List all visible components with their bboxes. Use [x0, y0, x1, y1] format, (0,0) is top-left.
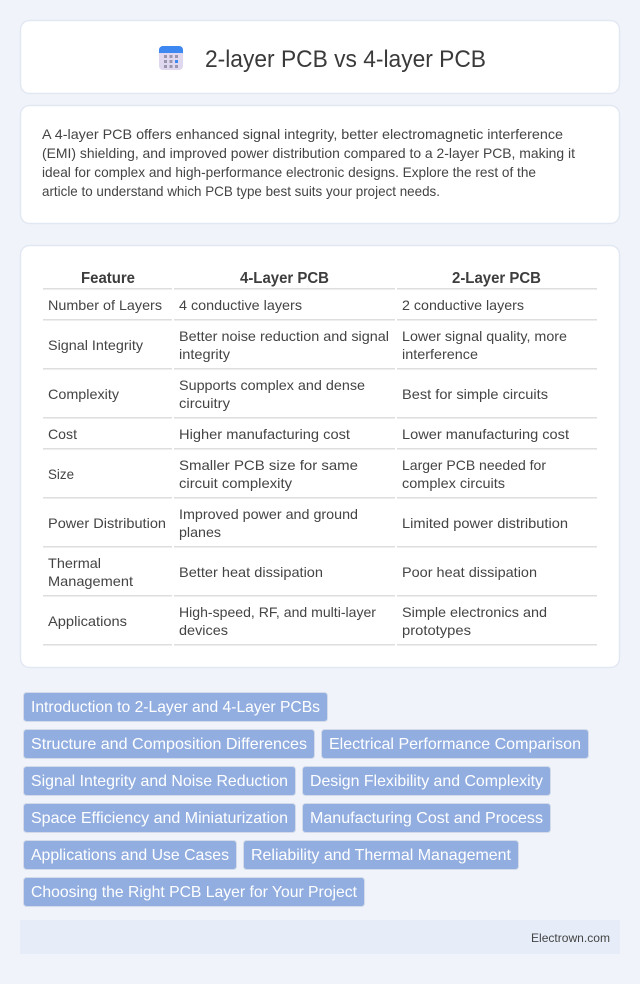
row: cost	[48, 426, 569, 442]
row: signal integrity: interference	[402, 346, 478, 362]
text block: intro paragraph: ideal for complex and high-performance electronic designs. Explore the rest of the	[42, 164, 536, 180]
tag: applications: Applications and Use Cases	[31, 847, 229, 864]
row: complexity: circuitry	[179, 395, 230, 411]
tag: space efficiency	[24, 804, 296, 832]
tag: reliability	[244, 840, 518, 870]
row: signal integrity	[48, 328, 567, 362]
row: size: circuit complexity	[179, 475, 292, 491]
row: signal integrity: integrity	[179, 346, 230, 362]
panel: header	[20, 20, 620, 94]
row: complexity	[48, 377, 548, 411]
text block: intro paragraph: article to understand which PCB type best suits your project needs.	[42, 183, 440, 199]
tag: space efficiency: Space Efficiency and Miniaturization	[31, 810, 288, 827]
row: cost: Higher manufacturing cost	[179, 426, 350, 442]
row: applications: Simple electronics and	[402, 604, 547, 620]
row: signal integrity: Lower signal quality, more	[402, 328, 567, 344]
row: thermal management: Poor heat dissipation	[402, 564, 537, 580]
row: applications: Applications	[48, 613, 127, 629]
row: size: complex circuits	[402, 475, 505, 491]
row: power distribution: planes	[179, 524, 221, 540]
tag: signal integrity	[24, 766, 296, 796]
row: power distribution: Limited power distribution	[402, 515, 568, 531]
row: signal integrity: Better noise reduction and signal	[179, 328, 389, 344]
row: cost: Cost	[48, 426, 77, 442]
tag: electrical performance: Electrical Performance Comparison	[329, 736, 581, 753]
table header row: 4-Layer PCB	[240, 270, 329, 287]
text block: intro paragraph: A 4-layer PCB offers enhanced signal integrity, better electromagnetic interference	[42, 126, 563, 142]
row: size: Larger PCB needed for	[402, 457, 546, 473]
footer credit: Electrown.com	[531, 931, 610, 945]
tag: electrical performance	[322, 730, 588, 758]
row: number of layers: Number of Layers	[48, 297, 162, 313]
text block: intro paragraph	[42, 126, 575, 199]
tag: structure	[24, 730, 314, 758]
row: thermal management	[48, 555, 537, 589]
row: complexity: Supports complex and dense	[179, 377, 365, 393]
panel: introduction	[20, 106, 620, 224]
row: size: Size	[48, 466, 74, 482]
text block: intro paragraph: (EMI) shielding, and improved power distribution compared to a 2-layer PCB, making it	[42, 145, 575, 161]
row: number of layers: 4 conductive layers	[179, 297, 302, 313]
icon: calendar grid	[159, 46, 183, 70]
row: power distribution: Improved power and ground	[179, 506, 358, 522]
row: complexity: Complexity	[48, 386, 119, 402]
row: applications: devices	[179, 622, 228, 638]
row: applications	[48, 604, 547, 638]
row: signal integrity: Signal Integrity	[48, 337, 143, 353]
row: number of layers	[48, 297, 524, 313]
tag: choosing layer	[24, 878, 364, 906]
row: power distribution	[48, 506, 568, 540]
tag: manufacturing cost: Manufacturing Cost and Process	[310, 810, 543, 827]
table header row	[81, 270, 541, 287]
tag: introduction	[24, 692, 328, 722]
tag: design flexibility	[302, 766, 550, 796]
tag: choosing layer: Choosing the Right PCB Layer for Your Project	[31, 884, 358, 901]
tag: structure: Structure and Composition Differences	[31, 736, 307, 753]
table header row: 2-Layer PCB	[452, 270, 541, 287]
panel: comparison table	[20, 246, 620, 668]
tag: reliability: Reliability and Thermal Management	[251, 847, 512, 864]
row: size	[48, 457, 546, 491]
tag: signal integrity: Signal Integrity and Noise Reduction	[31, 773, 288, 790]
footer	[20, 920, 620, 954]
row: thermal management: Thermal	[48, 555, 101, 571]
row: thermal management: Management	[48, 573, 133, 589]
row: number of layers: 2 conductive layers	[402, 297, 524, 313]
row: size: Smaller PCB size for same	[179, 457, 358, 473]
row: thermal management: Better heat dissipation	[179, 564, 323, 580]
row: applications: High-speed, RF, and multi-layer	[179, 604, 376, 620]
tag: introduction: Introduction to 2-Layer and 4-Layer PCBs	[31, 699, 320, 716]
row: cost: Lower manufacturing cost	[402, 426, 569, 442]
tag: design flexibility: Design Flexibility and Complexity	[310, 773, 543, 790]
row: power distribution: Power Distribution	[48, 515, 166, 531]
tag: manufacturing cost	[302, 804, 550, 832]
row: complexity: Best for simple circuits	[402, 386, 548, 402]
tag: applications	[24, 840, 236, 870]
topic tags	[24, 692, 588, 906]
table header row: Feature	[81, 270, 135, 287]
row: applications: prototypes	[402, 622, 471, 638]
title: 2-layer PCB vs 4-layer PCB	[205, 46, 486, 73]
